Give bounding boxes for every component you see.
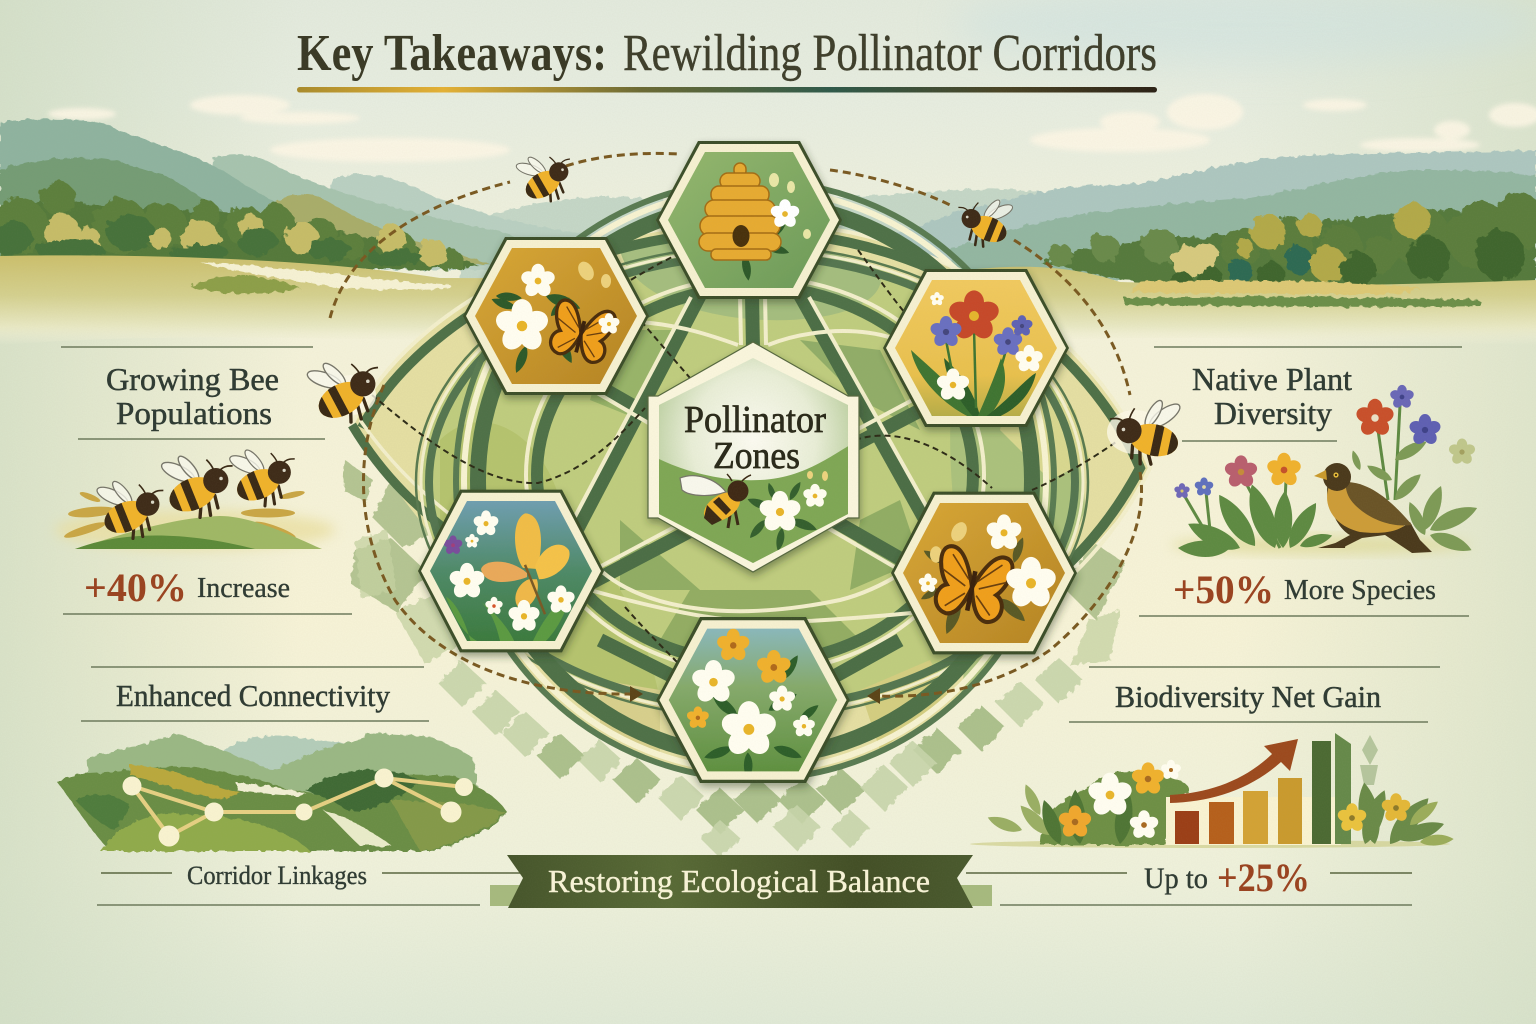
statistic: +40% increase: Increase [197,573,290,604]
heading: Diversity [1214,395,1332,431]
hexagon: beehive [656,141,842,299]
icon: hive [699,163,781,260]
bee: right of network [1107,394,1193,476]
outer lens ring [352,222,1150,600]
heading: Populations [116,395,272,431]
brown dashed bee flight path [330,153,1142,704]
statistic: +50% more species [1173,567,1436,612]
icon: centre bee [680,474,751,528]
title underline [297,87,1157,92]
corridor nodes [122,768,473,846]
bee: top left [512,150,576,211]
hexagon: meadow flowers at bottom [656,617,850,783]
statistic: up to +25% [966,855,1412,900]
bee: top right [958,198,1015,251]
left tree line [0,181,480,272]
growth arrow [1170,739,1298,803]
second ring [416,246,1088,718]
heading: Biodiversity Net Gain [1115,679,1381,714]
mosaic foliage patches around the network [343,400,1130,858]
heading [106,361,279,431]
caption: Corridor Linkages [187,861,367,890]
illustration: foliage [970,760,1450,848]
hexagon: white flowers and butterfly on amber [463,237,649,395]
large circle ring [456,181,1054,779]
illustration: corridor landscape [57,733,507,851]
heading: Enhanced Connectivity [116,678,390,713]
flight arrowheads [630,686,880,704]
banner: restoring ecological balance [490,855,992,908]
hexagon: yellow butterfly meadow [418,490,604,652]
panel: native plant diversity [1139,347,1480,616]
central hexagon: pollinator zones: Zones [713,435,800,477]
connecting straps [515,295,1000,690]
illustration: right foliage [1336,735,1454,850]
bee: left of network [302,355,384,433]
statistic: up to +25%: Up to [1144,862,1208,895]
icon: yellow butterfly [481,513,570,614]
clouds [48,94,1536,162]
title: Key Takeaways: [297,25,607,82]
statistic: +50% more species: More Species [1284,575,1436,606]
corridor network rings [352,181,1150,779]
thin black dotted paths [372,244,1116,670]
panel: biodiversity net gain [966,667,1454,905]
network base field [352,222,1150,778]
heading [1192,361,1352,431]
statistic: +40% increase: +40% [84,565,187,610]
centre distant hills [460,189,1080,280]
right tree line [1040,194,1536,296]
statistic: +50% more species: +50% [1173,567,1274,612]
panel: enhanced connectivity [57,667,520,905]
landscape: distant hills and fields [0,119,1536,345]
statistic: +40% increase [84,565,290,610]
hexagon: orange butterfly on amber [891,492,1077,654]
statistic: up to +25%: +25% [1217,855,1310,900]
panel: growing bee populations [55,347,352,614]
central hexagon: pollinator zones [648,342,859,572]
central hexagon: pollinator zones: Pollinator [684,399,826,441]
title [297,25,1157,92]
heading: Native Plant [1192,361,1352,397]
banner: restoring ecological balance: Restoring Ecological Balance [548,863,930,899]
illustration: flowers and bird [1170,385,1480,557]
title: Rewilding Pollinator Corridors [623,25,1157,82]
illustration: bees on a grassy hill [55,447,335,550]
bar chart [1166,733,1351,845]
corridor links [132,778,464,836]
inner green land [422,238,1090,755]
heading: Growing Bee [106,361,279,397]
icon: bird [1314,463,1432,553]
hexagon: red and blue wildflowers [883,269,1069,427]
inner ring [526,277,984,673]
